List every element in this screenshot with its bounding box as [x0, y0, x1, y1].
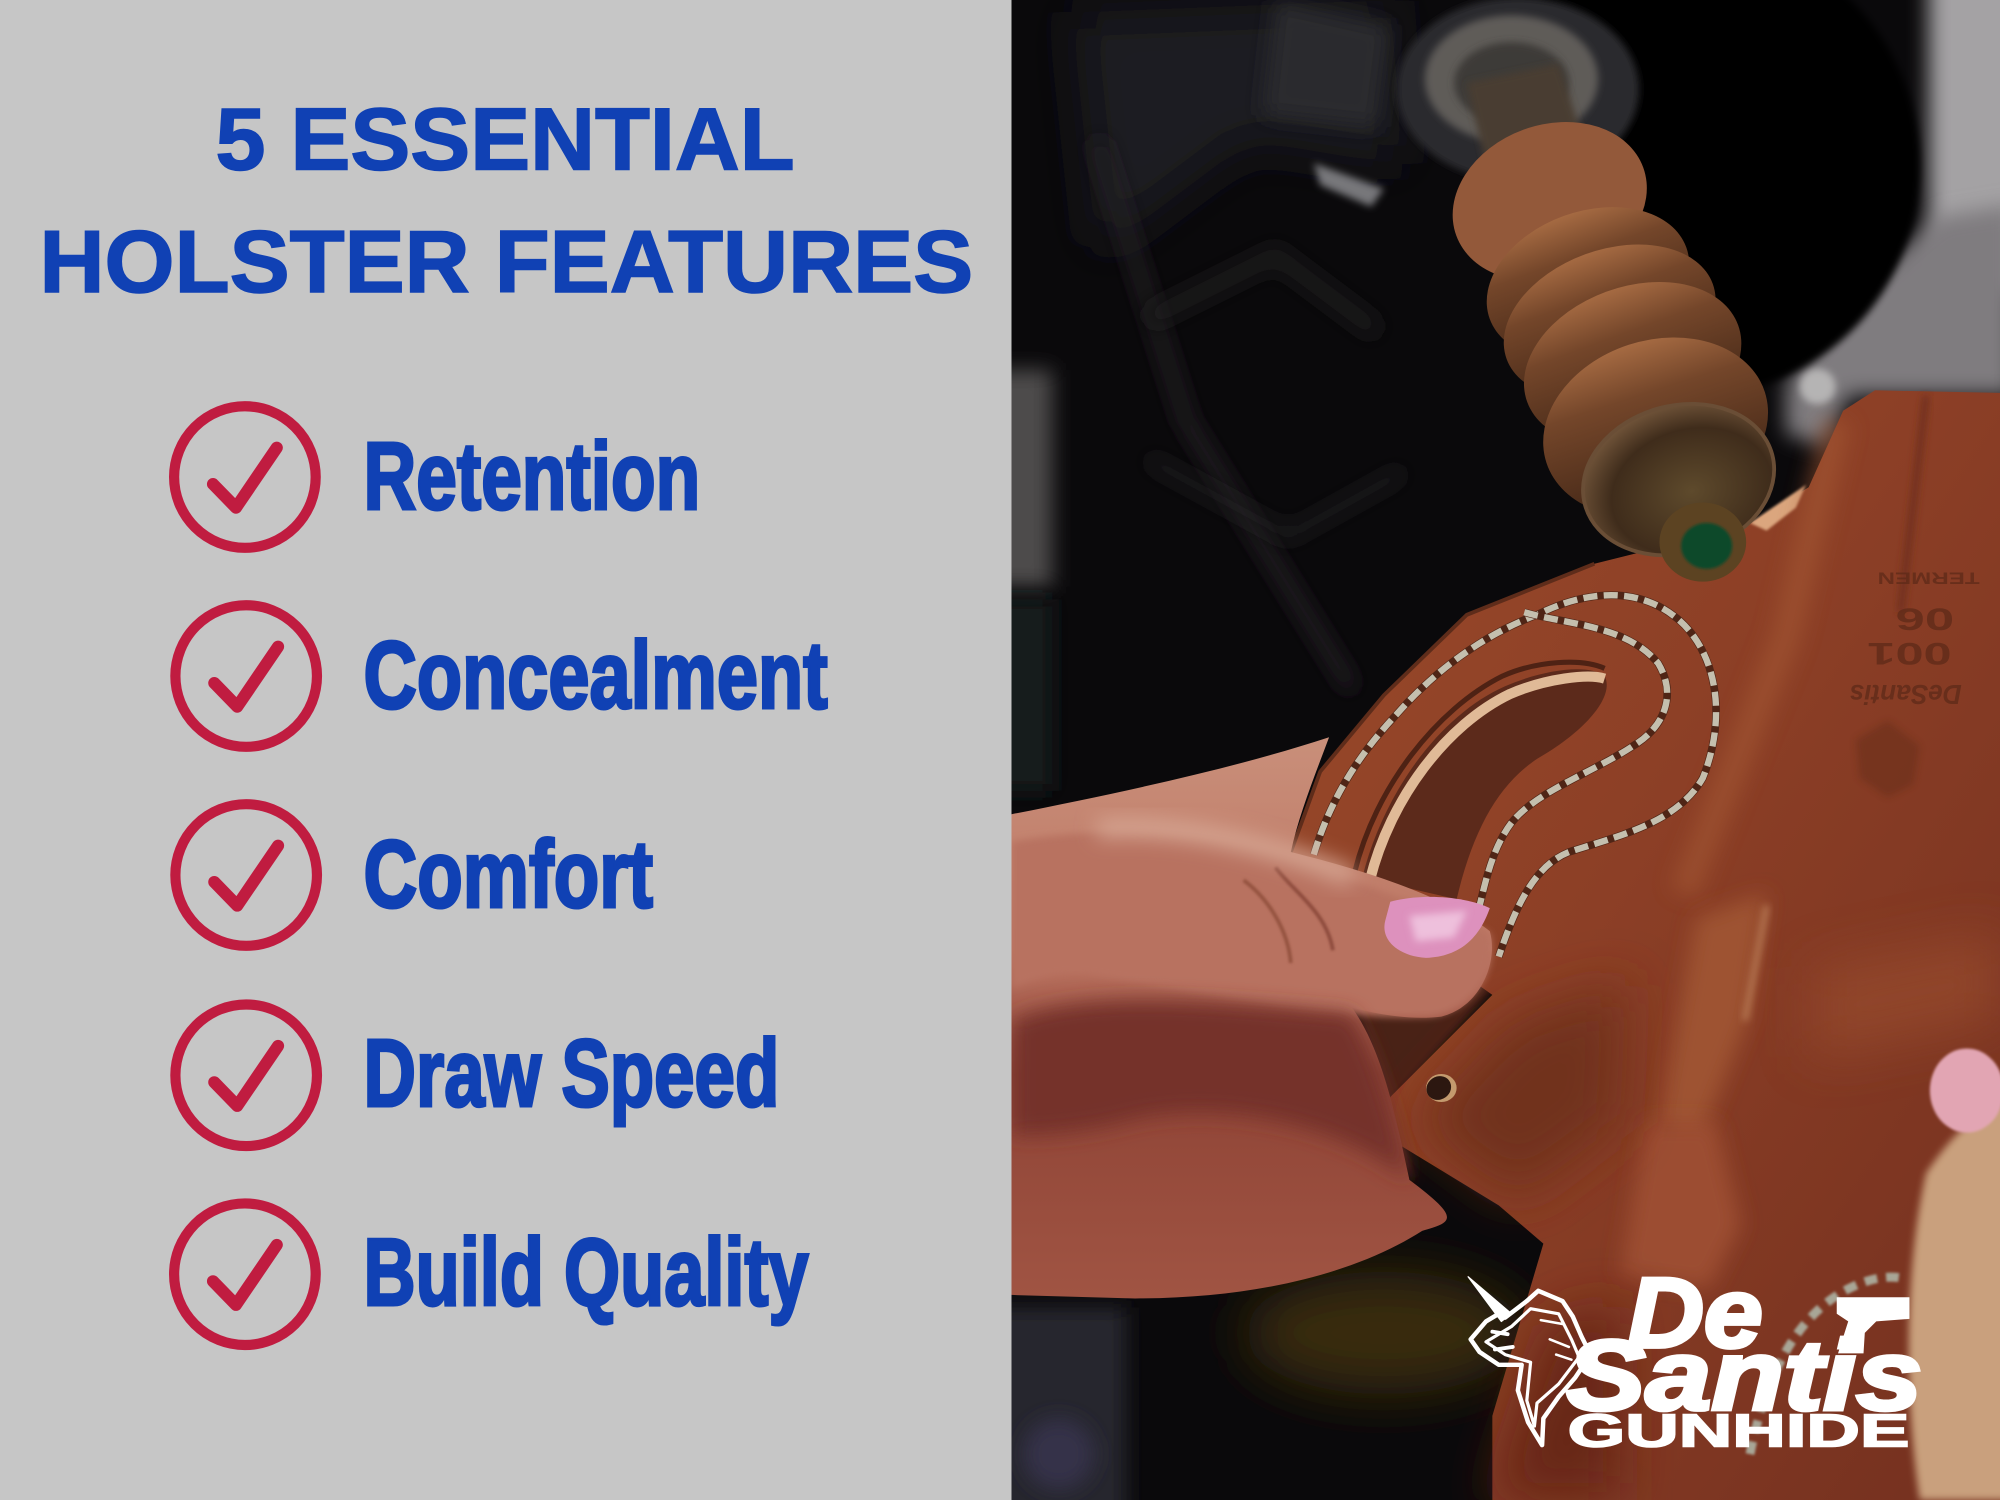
maker stamp: TERMEN	[1878, 569, 1980, 588]
title: 5 ESSENTIAL	[216, 90, 795, 189]
unicorn head mark	[1468, 1277, 1591, 1445]
feature list	[174, 406, 828, 1345]
belt slot	[1362, 669, 1607, 899]
feature: retention: Retention	[364, 423, 700, 530]
right fingers	[1909, 1048, 2000, 1500]
photo: hands holding leather holster at burnishing wheel	[989, 0, 2000, 1500]
burnishing spindle	[1397, 0, 1792, 582]
feature: build quality: Build Quality	[364, 1219, 809, 1326]
maker stamp: DeSantis	[1849, 679, 1962, 710]
leather holster	[1291, 390, 2000, 1500]
maker stamp	[1849, 569, 1980, 797]
thumbnail	[1384, 897, 1490, 958]
title: HOLSTER FEATURES	[40, 212, 973, 311]
maker stamp: 06	[1895, 601, 1954, 637]
stitching	[1314, 595, 1716, 957]
feature: comfort	[175, 804, 653, 946]
title	[40, 90, 973, 311]
feature: retention	[174, 406, 700, 548]
wordmark: Santis: Santis	[1566, 1320, 1922, 1431]
feature: build quality	[174, 1203, 809, 1345]
panel: left grey background	[0, 0, 1011, 1500]
feature: draw speed	[175, 1004, 779, 1146]
workshop background	[989, 0, 2000, 1500]
hand and thumb	[1001, 737, 1492, 1298]
logo: DeSantis Gunhide	[1468, 1276, 1921, 1448]
wordmark: De: De	[1628, 1258, 1763, 1369]
feature: draw speed: Draw Speed	[364, 1020, 779, 1127]
feature: concealment	[175, 605, 828, 747]
gun icon	[1837, 1297, 1909, 1353]
feature: concealment: Concealment	[364, 622, 828, 729]
feature: comfort: Comfort	[364, 821, 653, 928]
maker stamp: 001	[1867, 636, 1952, 672]
wordmark: Gunhide: GUNHIDE	[1568, 1404, 1909, 1456]
